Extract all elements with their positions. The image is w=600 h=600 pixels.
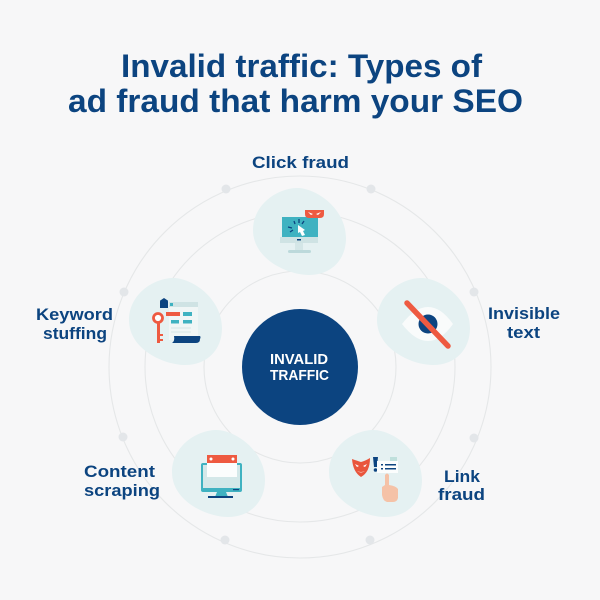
title: ad fraud that harm your SEO	[68, 83, 523, 119]
label: content scraping: Content	[84, 462, 155, 481]
label: content scraping	[84, 462, 160, 500]
icon: click fraud	[253, 188, 346, 275]
icon: invisible eye crossed out	[377, 278, 470, 365]
label: content scraping: scraping	[84, 481, 160, 500]
center circle: invalid traffic: TRAFFIC	[270, 367, 329, 384]
label: link fraud: Link	[444, 467, 481, 486]
title: Invalid traffic: Types of	[121, 48, 482, 84]
label: invisible text: text	[507, 323, 540, 342]
label: link fraud	[438, 467, 485, 504]
center circle: invalid traffic: INVALID	[270, 351, 328, 368]
icon: keyword stuffing document and key	[129, 278, 222, 365]
label: keyword stuffing: stuffing	[43, 324, 107, 343]
icon: content scraping monitor	[172, 430, 265, 517]
label: keyword stuffing	[36, 305, 113, 343]
title	[68, 48, 523, 119]
label: click fraud: Click fraud	[252, 153, 349, 172]
concentric orbit rings	[109, 176, 491, 558]
label: invisible text: Invisible	[488, 304, 560, 323]
label: keyword stuffing: Keyword	[36, 305, 113, 324]
center circle: invalid traffic	[242, 309, 358, 425]
icon: link fraud mask and hand	[329, 430, 422, 517]
orbit dots	[118, 184, 478, 544]
label: link fraud: fraud	[438, 485, 485, 504]
label: invisible text	[488, 304, 560, 342]
